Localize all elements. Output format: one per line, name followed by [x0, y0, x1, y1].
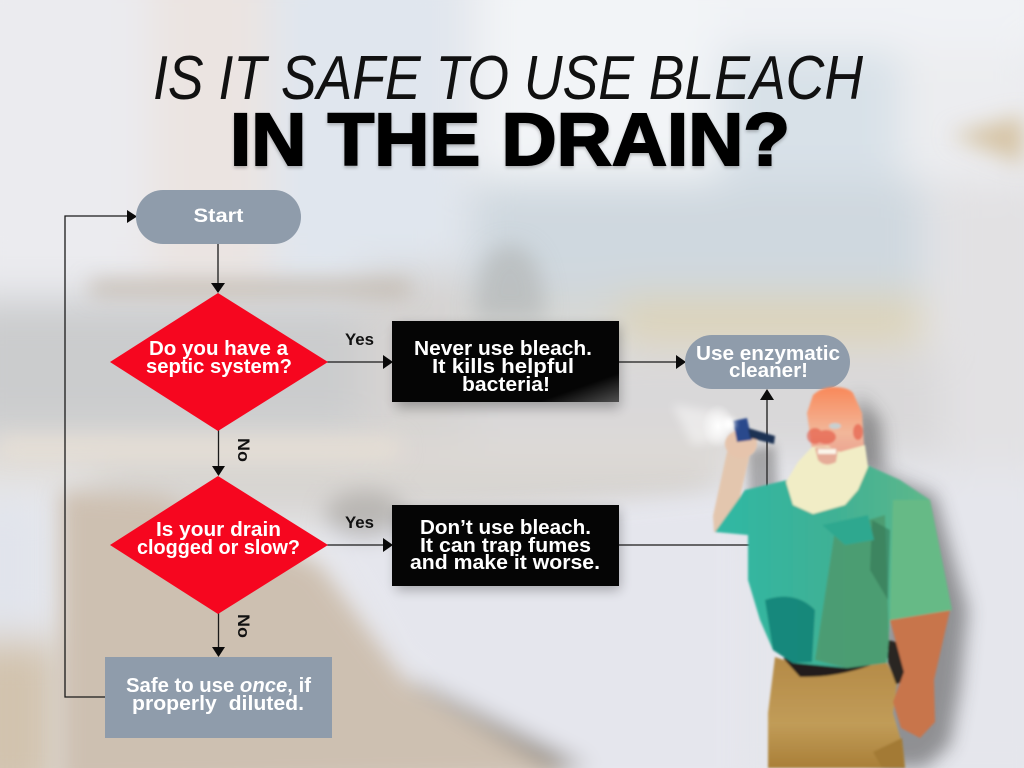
shirt shading: [815, 515, 889, 668]
label: no 1: No: [234, 438, 253, 462]
belt: [783, 652, 888, 677]
box: safe to use once: Safe to use once, if: [126, 675, 311, 697]
decision: clogged drain: [110, 476, 328, 614]
box: don't use bleach: Don’t use bleach.: [420, 517, 591, 539]
decision: septic system: septic system?: [146, 356, 292, 378]
flashlight: [733, 418, 775, 444]
raised arm: [713, 450, 751, 532]
beard: [786, 445, 868, 514]
title line 2: IN THE DRAIN?: [230, 98, 790, 181]
label: no 2: No: [234, 614, 253, 638]
box: safe to use once: properly diluted.: [132, 693, 304, 715]
cheeks: [807, 424, 863, 444]
decision: septic system: [110, 293, 328, 431]
arrowheads: [127, 210, 774, 657]
title line 1: IS IT SAFE TO USE BLEACH: [153, 44, 863, 113]
label: yes 1: Yes: [345, 330, 374, 349]
torso shirt: [715, 465, 952, 668]
box: never use bleach: Never use bleach.: [414, 338, 592, 360]
trousers: [768, 657, 905, 768]
node: enzymatic cleaner: [685, 335, 850, 389]
node: enzymatic cleaner: cleaner!: [729, 360, 808, 382]
man's drop shadow: [748, 395, 968, 768]
decision: clogged drain: clogged or slow?: [137, 537, 300, 559]
chest pocket: [822, 515, 874, 545]
flashlight glare: [723, 418, 735, 430]
box: don't use bleach: It can trap fumes: [420, 535, 591, 557]
head: [807, 387, 864, 470]
decision: clogged drain: Is your drain: [156, 519, 281, 541]
node: enzymatic cleaner: Use enzymatic: [696, 343, 840, 365]
lowered arm: [890, 610, 950, 738]
box: safe to use once: [105, 657, 332, 738]
shadow behind black boxes: [396, 326, 620, 590]
flowchart connectors: [65, 216, 767, 697]
start node: Start: [194, 206, 244, 227]
box: never use bleach: bacteria!: [462, 374, 550, 396]
box: don't use bleach: and make it worse.: [410, 552, 600, 574]
title: [153, 44, 863, 181]
sleeve: [890, 500, 952, 620]
hand: [725, 430, 757, 458]
eyes: [829, 423, 841, 429]
box: never use bleach: It kills helpful: [432, 356, 574, 378]
decision: septic system: Do you have a: [149, 338, 289, 360]
man with flashlight: [713, 387, 952, 768]
mouth: [815, 447, 838, 465]
dark gap near arm: [888, 640, 908, 684]
start node: [136, 190, 301, 244]
flashlight beam: [672, 404, 734, 448]
label: yes 2: Yes: [345, 513, 374, 532]
box: don't use bleach: [392, 505, 619, 586]
box: never use bleach: [392, 321, 619, 402]
